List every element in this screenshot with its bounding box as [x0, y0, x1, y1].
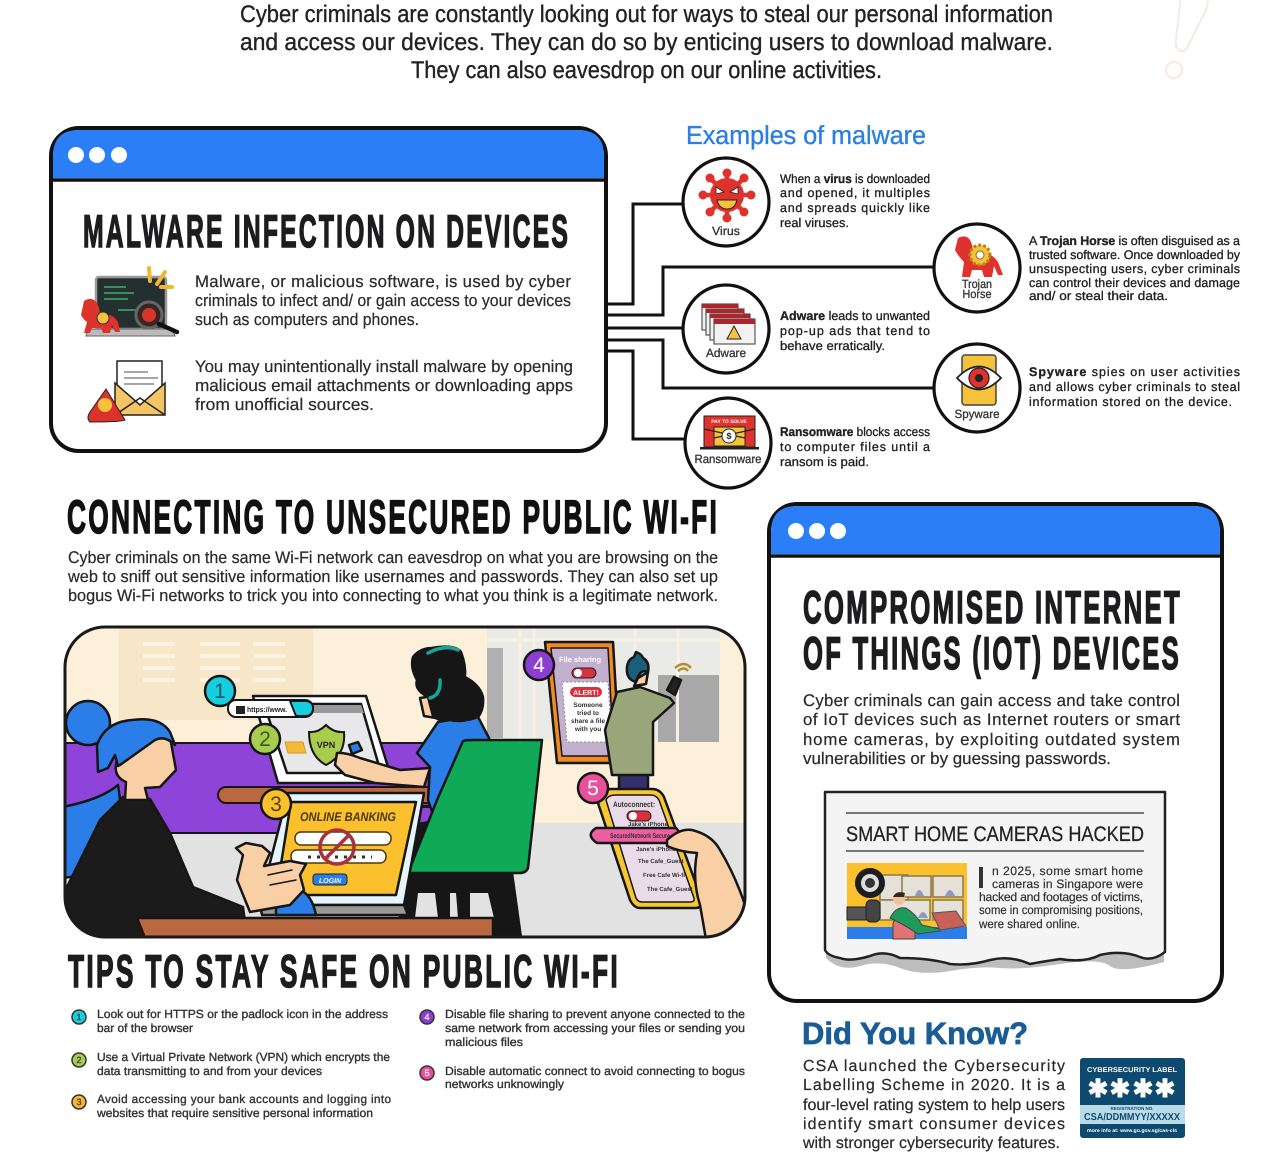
- icon: faint exclamation mark: [1166, 0, 1208, 78]
- icon: adware: [683, 285, 769, 373]
- text: did you know: with stronger cybersecurity features.: [802, 1135, 1060, 1152]
- window title bar: [770, 506, 1221, 556]
- text: how malware installs: from unofficial sources.: [195, 395, 374, 414]
- item: ransomware: [685, 398, 930, 488]
- tip 4: Disable file sharing to prevent anyone connected to the: [445, 1007, 745, 1021]
- tip 5: 5: [424, 1068, 430, 1078]
- illustration: cafe scene: ONLINE BANKING: [300, 810, 396, 824]
- tip 3: [72, 1092, 391, 1120]
- text: virus description: real viruses.: [780, 216, 849, 230]
- text: virus description: and opened, it multiples: [780, 186, 930, 200]
- heading: examples of malware: Examples of malware: [686, 120, 926, 150]
- text: iot description: of IoT devices such as Internet routers or smart: [803, 710, 1180, 729]
- news image: security camera: [847, 863, 967, 939]
- text: virus description: When a virus is downloaded: [780, 172, 930, 186]
- text: iot description: home cameras, by exploiting outdated system: [803, 730, 1180, 749]
- standing person: [605, 652, 681, 792]
- file sharing phone: [545, 642, 620, 763]
- icon: virus: Virus: [712, 224, 740, 238]
- tip 5: [420, 1064, 745, 1091]
- icon: ransomware: PAY TO SOLVE: [711, 419, 747, 425]
- text: did you know: identify smart consumer devices: [803, 1116, 1065, 1133]
- text: wi-fi risk description: Cyber criminals on the same Wi-Fi network can eavesdrop on what you are browsing on the: [68, 548, 718, 567]
- cybersecurity label: ✱: [1155, 1074, 1175, 1103]
- text: did you know: CSA launched the Cybersecurity: [803, 1058, 1065, 1075]
- text: ransomware description: to computer files until a: [780, 440, 930, 454]
- heading: malware infection: MALWARE INFECTION ON DEVICES: [83, 205, 570, 257]
- news story: hacked and footages of victims,: [979, 890, 1143, 904]
- item: spyware: [934, 344, 1240, 432]
- illustration: cafe scene: 3: [270, 793, 282, 816]
- news story: were shared online.: [978, 917, 1080, 931]
- item: adware: [683, 285, 930, 373]
- illustration: cafe scene: Someone: [573, 702, 603, 709]
- illustration: cafe scene: tried to: [577, 710, 599, 717]
- text: trojan horse description: unsuspecting users, cyber criminals: [1029, 262, 1240, 276]
- cybersecurity label: ✱: [1088, 1074, 1108, 1103]
- text: wi-fi risk description: bogus Wi-Fi networks to trick you into connecting to what you think is a legitimate network.: [68, 586, 718, 605]
- icon: spyware: Spyware: [954, 407, 1000, 421]
- news clipping: [825, 792, 1165, 973]
- seated person in blue: [335, 647, 495, 860]
- icon: trojan horse: [934, 224, 1020, 312]
- intro text: Cyber criminals are constantly looking out for ways to steal our personal information: [240, 1, 1053, 28]
- text: adware description: Adware leads to unwanted: [780, 309, 930, 323]
- heading: did you know: Did You Know?: [802, 1016, 1028, 1051]
- front table: [137, 918, 493, 938]
- illustration: cafe scene: Jane's iPhone: [636, 846, 677, 853]
- icon: adware: Adware: [706, 346, 746, 360]
- illustration: cafe scene: 2: [259, 728, 271, 751]
- tip 1: Look out for HTTPS or the padlock icon in the address: [97, 1007, 388, 1021]
- item: trojan horse: [934, 224, 1241, 312]
- intro text: [240, 1, 1053, 84]
- text: what malware is: such as computers and phones.: [195, 310, 419, 329]
- news story: cameras in Singapore were: [992, 877, 1143, 891]
- illustration: cafe scene: 1: [214, 680, 226, 703]
- illustration: cafe scene: Free Cafe Wi-fi: [643, 872, 685, 879]
- icon: spyware: [934, 344, 1020, 432]
- illustration: cafe scene: with you: [574, 726, 601, 733]
- text: wi-fi risk description: [67, 548, 718, 605]
- panel: malware infection on devices: [51, 128, 606, 451]
- text: virus description: [780, 172, 930, 230]
- illustration: cafe scene: 4: [533, 654, 545, 677]
- icon: virus: [683, 158, 769, 246]
- illustration: cafe scene: VPN: [317, 740, 335, 750]
- news story: some in compromising positions,: [979, 903, 1143, 917]
- illustration: cafe scene: SecuredNetwork Secure: [610, 832, 670, 840]
- text: spyware description: Spyware spies on user activities: [1029, 365, 1240, 379]
- illustration: cafe scene: Jake's iPhone: [628, 821, 668, 828]
- panel: compromised iot devices: [769, 504, 1222, 1001]
- tip 5: Disable automatic connect to avoid connecting to bogus: [445, 1064, 745, 1078]
- wi-fi list phone: [597, 789, 702, 908]
- text: what malware is: [195, 272, 571, 329]
- back laptop: [253, 696, 393, 783]
- illustration: cafe scene: share a file: [571, 718, 605, 725]
- icon: ransomware: Ransomware: [694, 452, 762, 466]
- tip 2: [72, 1050, 390, 1078]
- cybersecurity label: ✱: [1110, 1074, 1130, 1103]
- tip 4: malicious files: [445, 1035, 523, 1049]
- heading: connecting to unsecured public wi-fi: CONNECTING TO UNSECURED PUBLIC WI-FI: [67, 490, 719, 543]
- text: trojan horse description: A Trojan Horse is often disguised as a: [1029, 234, 1240, 248]
- list: tips: [72, 1007, 745, 1120]
- tip 3: websites that require sensitive personal information: [96, 1106, 373, 1120]
- tip 3: Avoid accessing your bank accounts and logging into: [97, 1092, 391, 1106]
- cybersecurity label: CYBERSECURITY LABEL: [1087, 1067, 1178, 1074]
- text: did you know: Labelling Scheme in 2020. It is a: [803, 1077, 1065, 1094]
- icon: ransomware: [685, 398, 771, 488]
- text: what malware is: criminals to infect and/ or gain access to your devices: [195, 291, 571, 310]
- url bar: https://www.: [247, 705, 287, 714]
- text: trojan horse description: trusted software. Once downloaded by: [1029, 248, 1241, 262]
- news story: [978, 864, 1143, 931]
- icon: infected laptop: [81, 268, 177, 336]
- news story: n 2025, some smart home: [992, 864, 1143, 878]
- text: adware description: pop-up ads that tend to: [780, 324, 930, 338]
- text: what malware is: Malware, or malicious software, is used by cyber: [195, 272, 571, 291]
- cybersecurity label: more info at: www.go.gov.sg/cas-cls: [1087, 1128, 1177, 1134]
- text: iot description: Cyber criminals can gain access and take control: [803, 691, 1180, 710]
- url bar: [228, 700, 313, 717]
- text: ransomware description: ransom is paid.: [780, 455, 869, 469]
- text: spyware description: information stored on the device.: [1029, 395, 1232, 409]
- illustration: cafe scene: LOGIN: [319, 878, 342, 885]
- tip 3: 3: [76, 1097, 82, 1107]
- front laptop: [259, 793, 424, 915]
- illustration: cafe scene: The Cafe_Guest: [647, 886, 693, 893]
- text: spyware description: and allows cyber criminals to steal: [1029, 380, 1240, 394]
- green chair: [400, 740, 542, 945]
- tip 1: [72, 1007, 388, 1035]
- table back: [218, 787, 478, 803]
- connector lines from malware panel to examples: [606, 204, 934, 439]
- text: wi-fi risk description: web to sniff out sensitive information like usernames and passwords. They can also set up: [67, 567, 718, 586]
- tip 4: same network from accessing your files or sending you: [445, 1021, 745, 1035]
- tip 1: 1: [76, 1012, 82, 1022]
- blue chair: [66, 784, 121, 879]
- tip 2: 2: [76, 1055, 82, 1065]
- text: did you know: four-level rating system to help users: [803, 1097, 1065, 1114]
- tip 2: data transmitting to and from your devices: [97, 1064, 322, 1078]
- illustration: cafe scene: ALERT!: [573, 690, 599, 697]
- illustration: cafe scene: [62, 626, 746, 945]
- text: how malware installs: malicious email attachments or downloading apps: [195, 376, 573, 395]
- person in black: [62, 701, 306, 942]
- text: how malware installs: You may unintentionally install malware by opening: [195, 357, 573, 376]
- item: virus: [683, 158, 930, 246]
- illustration: cafe scene: File sharing: [559, 655, 601, 664]
- tip 4: 4: [424, 1012, 430, 1022]
- illustration: cafe scene: The Cafe_Guest: [638, 858, 684, 865]
- text: spyware description: [1029, 365, 1240, 409]
- cybersecurity label: [1080, 1058, 1185, 1138]
- intro text: They can also eavesdrop on our online activities.: [411, 57, 882, 84]
- text: adware description: behave erratically.: [780, 339, 885, 353]
- tip 1: bar of the browser: [97, 1021, 193, 1035]
- cybersecurity label: CSA/DDMMYY/XXXXX: [1084, 1112, 1180, 1123]
- illustration: cafe scene: 5: [587, 777, 599, 800]
- icon: malicious email: [88, 361, 165, 422]
- text: trojan horse description: and/ or steal their data.: [1029, 289, 1168, 303]
- heading: compromised iot: [803, 581, 1182, 679]
- news headline: SMART HOME CAMERAS HACKED: [846, 823, 1144, 846]
- icon: ransomware: $: [726, 431, 732, 441]
- numbered markers: [205, 650, 608, 819]
- window title bar: [52, 130, 605, 180]
- tip 4: [420, 1007, 745, 1049]
- illustration: cafe scene: Autoconnect:: [613, 800, 655, 809]
- text: ransomware description: Ransomware blocks access: [780, 425, 930, 439]
- text: trojan horse description: [1029, 234, 1241, 303]
- intro text: and access our devices. They can do so by enticing users to download malware.: [240, 29, 1053, 56]
- cybersecurity label: ✱: [1133, 1074, 1153, 1103]
- text: trojan horse description: can control their devices and damage: [1029, 276, 1240, 290]
- tip 2: Use a Virtual Private Network (VPN) which encrypts the: [97, 1050, 390, 1064]
- icon: trojan horse: Horse: [962, 287, 992, 301]
- text: iot description: vulnerabilities or by guessing passwords.: [803, 749, 1111, 768]
- text: adware description: [780, 309, 930, 353]
- text: virus description: and spreads quickly like: [780, 201, 930, 215]
- text: ransomware description: [780, 425, 930, 469]
- cybersecurity label: REGISTRATION NO.: [1111, 1106, 1153, 1111]
- heading: tips to stay safe: TIPS TO STAY SAFE ON PUBLIC WI-FI: [68, 945, 620, 997]
- icon: trojan horse: Trojan: [962, 277, 992, 291]
- text: did you know: [802, 1058, 1065, 1152]
- text: iot description: [803, 691, 1180, 768]
- text: how malware installs: [195, 357, 573, 414]
- tip 5: networks unknowingly: [445, 1077, 564, 1091]
